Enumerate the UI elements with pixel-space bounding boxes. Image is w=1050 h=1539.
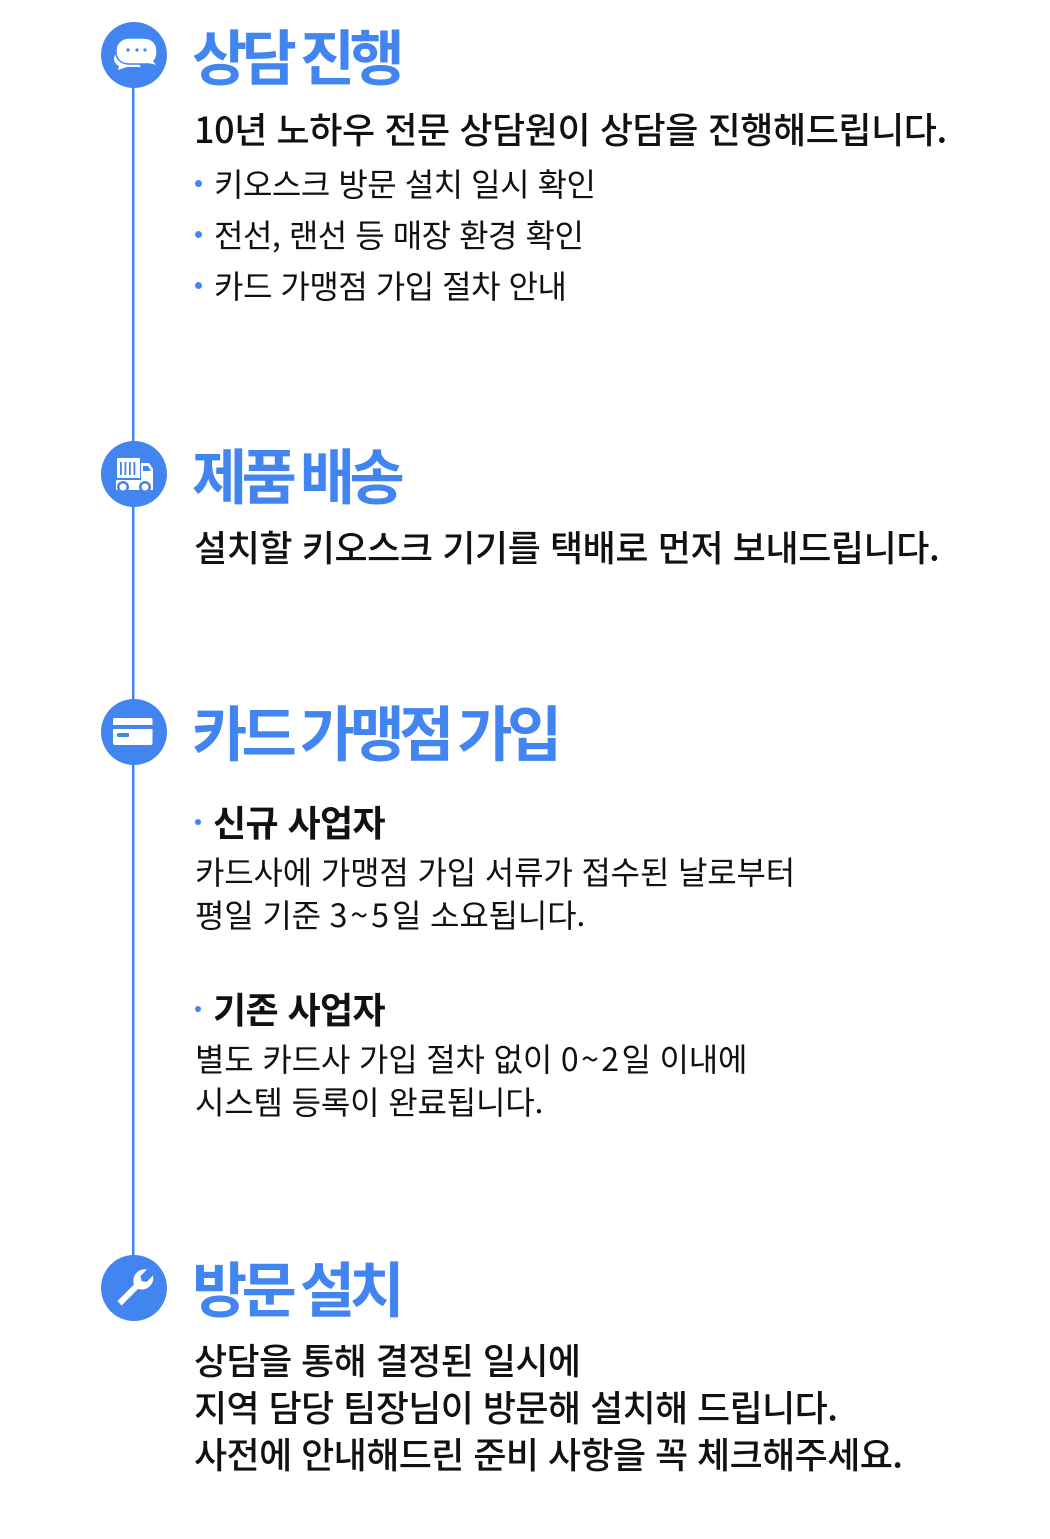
subheading: 기존 사업자: 기존 사업자 (213, 982, 385, 1034)
heading: 상담 진행: 상담 진행 (192, 11, 399, 98)
icon: delivery truck (101, 441, 167, 507)
new business text: 평일 기준 3~5일 소요됩니다. (195, 891, 585, 937)
icon: wrench (101, 1255, 167, 1321)
visit text: 지역 담당 팀장님이 방문해 설치해 드립니다. (194, 1380, 837, 1432)
existing business text (195, 1035, 747, 1124)
delivery text: 설치할 키오스크 기기를 택배로 먼저 보내드립니다. (194, 520, 939, 572)
new business text (195, 848, 795, 937)
heading: 방문 설치: 방문 설치 (192, 1243, 399, 1330)
heading: 카드 가맹점 가입: 카드 가맹점 가입 (192, 687, 557, 774)
existing business text: 시스템 등록이 완료됩니다. (195, 1078, 543, 1124)
bullet: 가입 절차: 카드 가맹점 가입 절차 안내 (214, 262, 566, 308)
subheading: 신규 사업자: 신규 사업자 (213, 795, 385, 847)
heading: 제품 배송: 제품 배송 (192, 430, 399, 517)
vertical line (132, 80, 134, 1270)
visit text: 사전에 안내해드린 준비 사항을 꼭 체크해주세요. (194, 1427, 902, 1479)
intro text: 10년 노하우 전문 상담원이 상담을 진행해드립니다. (194, 102, 947, 154)
existing business text: 별도 카드사 가입 절차 없이 0~2일 이내에 (195, 1035, 747, 1081)
bullet: 매장 환경: 전선, 랜선 등 매장 환경 확인 (214, 211, 583, 257)
icon: credit card (101, 699, 167, 765)
bullet: 일시 확인: 키오스크 방문 설치 일시 확인 (214, 160, 595, 206)
new business text: 카드사에 가맹점 가입 서류가 접수된 날로부터 (195, 848, 795, 894)
visit text: 상담을 통해 결정된 일시에 (194, 1333, 580, 1385)
visit text (194, 1333, 902, 1479)
icon: speech bubbles (101, 22, 167, 88)
